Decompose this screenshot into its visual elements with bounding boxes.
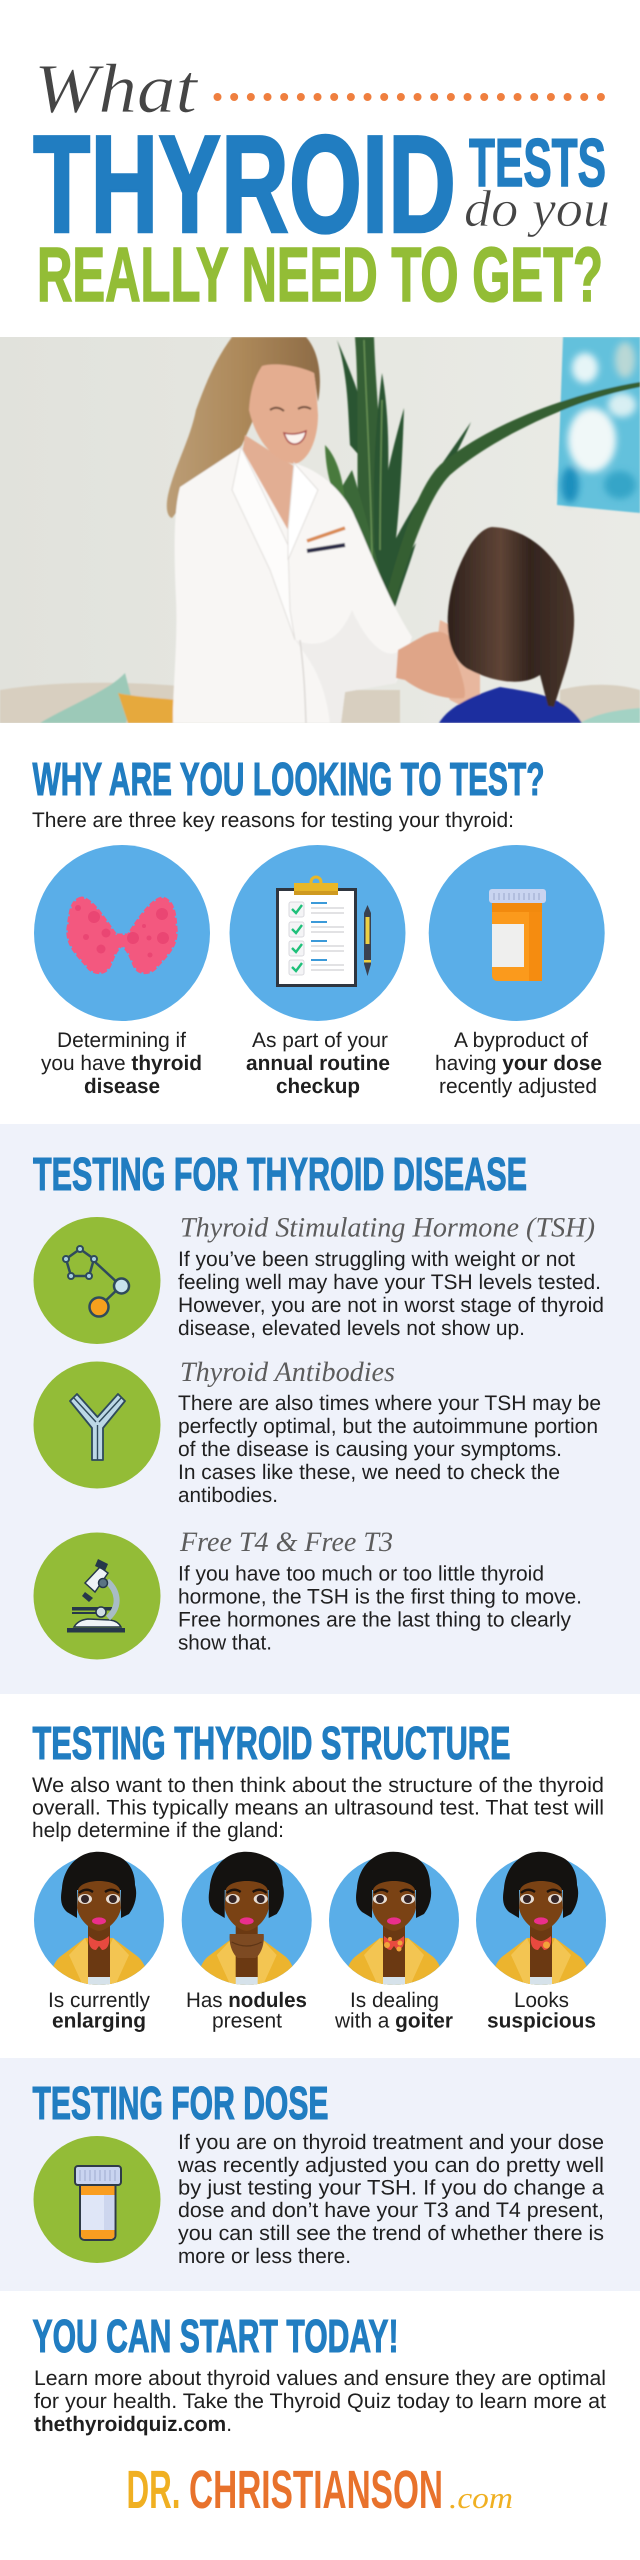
body text (178, 1392, 601, 1507)
body text: If you’ve been struggling with weight or not (178, 1248, 575, 1271)
portrait (182, 1852, 312, 1990)
patient neck (438, 620, 480, 715)
title: What: What (34, 51, 199, 128)
subhead: Thyroid Antibodies (180, 1357, 395, 1388)
body text: There are also times where your TSH may be (178, 1392, 601, 1415)
body text: hormone, the TSH is the first thing to move. (178, 1586, 582, 1608)
dotted orange rule (218, 93, 601, 101)
icon: microscope (34, 1532, 160, 1660)
body text: Learn more about thyroid values and ensure they are optimal (34, 2367, 606, 2390)
doctor face (249, 364, 318, 464)
body text: In cases like these, we need to check the (178, 1461, 560, 1484)
section: you can start today (32, 2310, 606, 2436)
body text: of the disease is causing your symptoms. (178, 1438, 562, 1461)
figure: goiter (329, 1852, 459, 2032)
logo: Dr. Christianson .com: DR. (126, 2460, 180, 2520)
title: THYROID: THYROID (33, 107, 456, 262)
caption (334, 1989, 453, 2032)
caption: enlarging (52, 2010, 146, 2032)
portrait (476, 1852, 606, 1990)
intro text: There are three key reasons for testing your thyroid: (32, 809, 514, 832)
body text: If you have too much or too little thyroid (178, 1562, 544, 1586)
portrait (329, 1852, 459, 1990)
body text: more or less there. (178, 2245, 351, 2268)
body text: antibodies. (178, 1484, 278, 1507)
body text: perfectly optimal, but the autoimmune portion (178, 1415, 598, 1438)
patient top (439, 687, 582, 723)
body text (34, 2367, 606, 2436)
logo: Dr. Christianson .com: CHRISTIANSON (189, 2460, 443, 2520)
caption: recently adjusted (439, 1075, 597, 1098)
item: antibodies (34, 1357, 601, 1507)
body text: you can still see the trend of whether there is (178, 2222, 604, 2245)
doctor hand (396, 632, 465, 698)
caption (246, 1029, 390, 1098)
intro text: overall. This typically means an ultrasound test. That test will (32, 1796, 604, 1820)
body text: thethyroidquiz.com. (34, 2413, 232, 2436)
item: TSH (34, 1212, 604, 1344)
caption (48, 1989, 150, 2032)
sofa (0, 683, 640, 723)
body text: dose and don’t have your T3 and T4 present, (178, 2199, 604, 2222)
caption: present (212, 2010, 282, 2032)
caption: Determining if (57, 1029, 186, 1052)
doctor hair (167, 337, 320, 518)
painting (557, 337, 640, 513)
title: do you: do you (464, 181, 610, 238)
logo: Dr. Christianson .com (126, 2460, 513, 2520)
caption: Is dealing (350, 1989, 439, 2012)
long arching leaf (388, 381, 640, 601)
photo: doctor checking patient's thyroid (0, 337, 640, 723)
caption: A byproduct of (454, 1029, 588, 1052)
icon: clipboard and pen (278, 877, 371, 986)
caption: Is currently (48, 1989, 150, 2012)
figure: suspicious (476, 1852, 606, 2032)
subhead: Thyroid Stimulating Hormone (TSH) (180, 1212, 595, 1244)
heading: YOU CAN START TODAY! (32, 2310, 398, 2362)
caption (435, 1029, 602, 1098)
body text (177, 2131, 604, 2268)
figure: nodules (182, 1852, 312, 2032)
portrait (34, 1852, 164, 1990)
item: free T4 and T3 (34, 1527, 582, 1660)
intro text: help determine if the gland: (32, 1819, 284, 1842)
doctor neck (242, 435, 294, 529)
caption: checkup (276, 1075, 360, 1098)
caption: suspicious (487, 2010, 596, 2032)
body text: Free hormones are the last thing to clearly (178, 1608, 571, 1632)
reason: thyroid disease (34, 845, 210, 1098)
caption: Looks (514, 1989, 569, 2012)
reason: dose adjusted (429, 845, 605, 1098)
intro text: We also want to then think about the structure of the thyroid (32, 1774, 604, 1797)
section: testing thyroid structure (32, 1717, 606, 2032)
caption: you have thyroid (41, 1052, 202, 1075)
body text: was recently adjusted you can do pretty well (177, 2154, 604, 2177)
heading: TESTING FOR DOSE (32, 2077, 328, 2129)
caption: having your dose (435, 1052, 602, 1075)
caption: annual routine (246, 1052, 390, 1075)
body text (178, 1248, 604, 1340)
title (33, 51, 610, 318)
icon: antibody (34, 1362, 160, 1488)
icon: thyroid gland (68, 898, 176, 973)
reason: annual checkup (230, 845, 406, 1098)
caption: disease (84, 1075, 160, 1098)
figure: enlarging (34, 1852, 164, 2032)
body text: for your health. Take the Thyroid Quiz today to learn more at (34, 2390, 606, 2413)
snake plant leaves (325, 337, 471, 625)
icon: molecule (34, 1217, 160, 1344)
body text: feeling well may have your TSH levels tested. (178, 1271, 601, 1294)
caption (487, 1989, 596, 2032)
caption (186, 1989, 307, 2032)
section: why are you looking to test (32, 753, 605, 1098)
icon: pill bottle (489, 889, 546, 981)
caption: As part of your (252, 1029, 388, 1052)
panel: testing for thyroid disease (0, 1124, 640, 1694)
doctor mouth (284, 431, 306, 444)
circle (429, 845, 605, 1021)
body text: However, you are not in worst stage of thyroid (178, 1294, 604, 1317)
circle (230, 845, 406, 1021)
patient hair (448, 527, 574, 707)
body text (178, 1562, 582, 1654)
body text: show that. (178, 1632, 272, 1654)
caption (41, 1029, 202, 1098)
circle (34, 845, 210, 1021)
logo: Dr. Christianson .com: .com (449, 2482, 513, 2515)
body text: by just testing your TSH. If you do change a (178, 2176, 604, 2200)
caption: with a goiter (334, 2010, 453, 2032)
icon: medicine bottle (34, 2136, 160, 2263)
doctor white coat (173, 447, 412, 723)
coat embroidery (307, 528, 345, 541)
body text: If you are on thyroid treatment and your dose (178, 2131, 604, 2154)
panel: testing for dose (0, 2058, 640, 2291)
body text: disease, elevated levels not show up. (178, 1317, 525, 1340)
intro text (32, 1774, 604, 1842)
caption: Has nodules (186, 1989, 307, 2012)
subhead: Free T4 & Free T3 (179, 1527, 393, 1558)
